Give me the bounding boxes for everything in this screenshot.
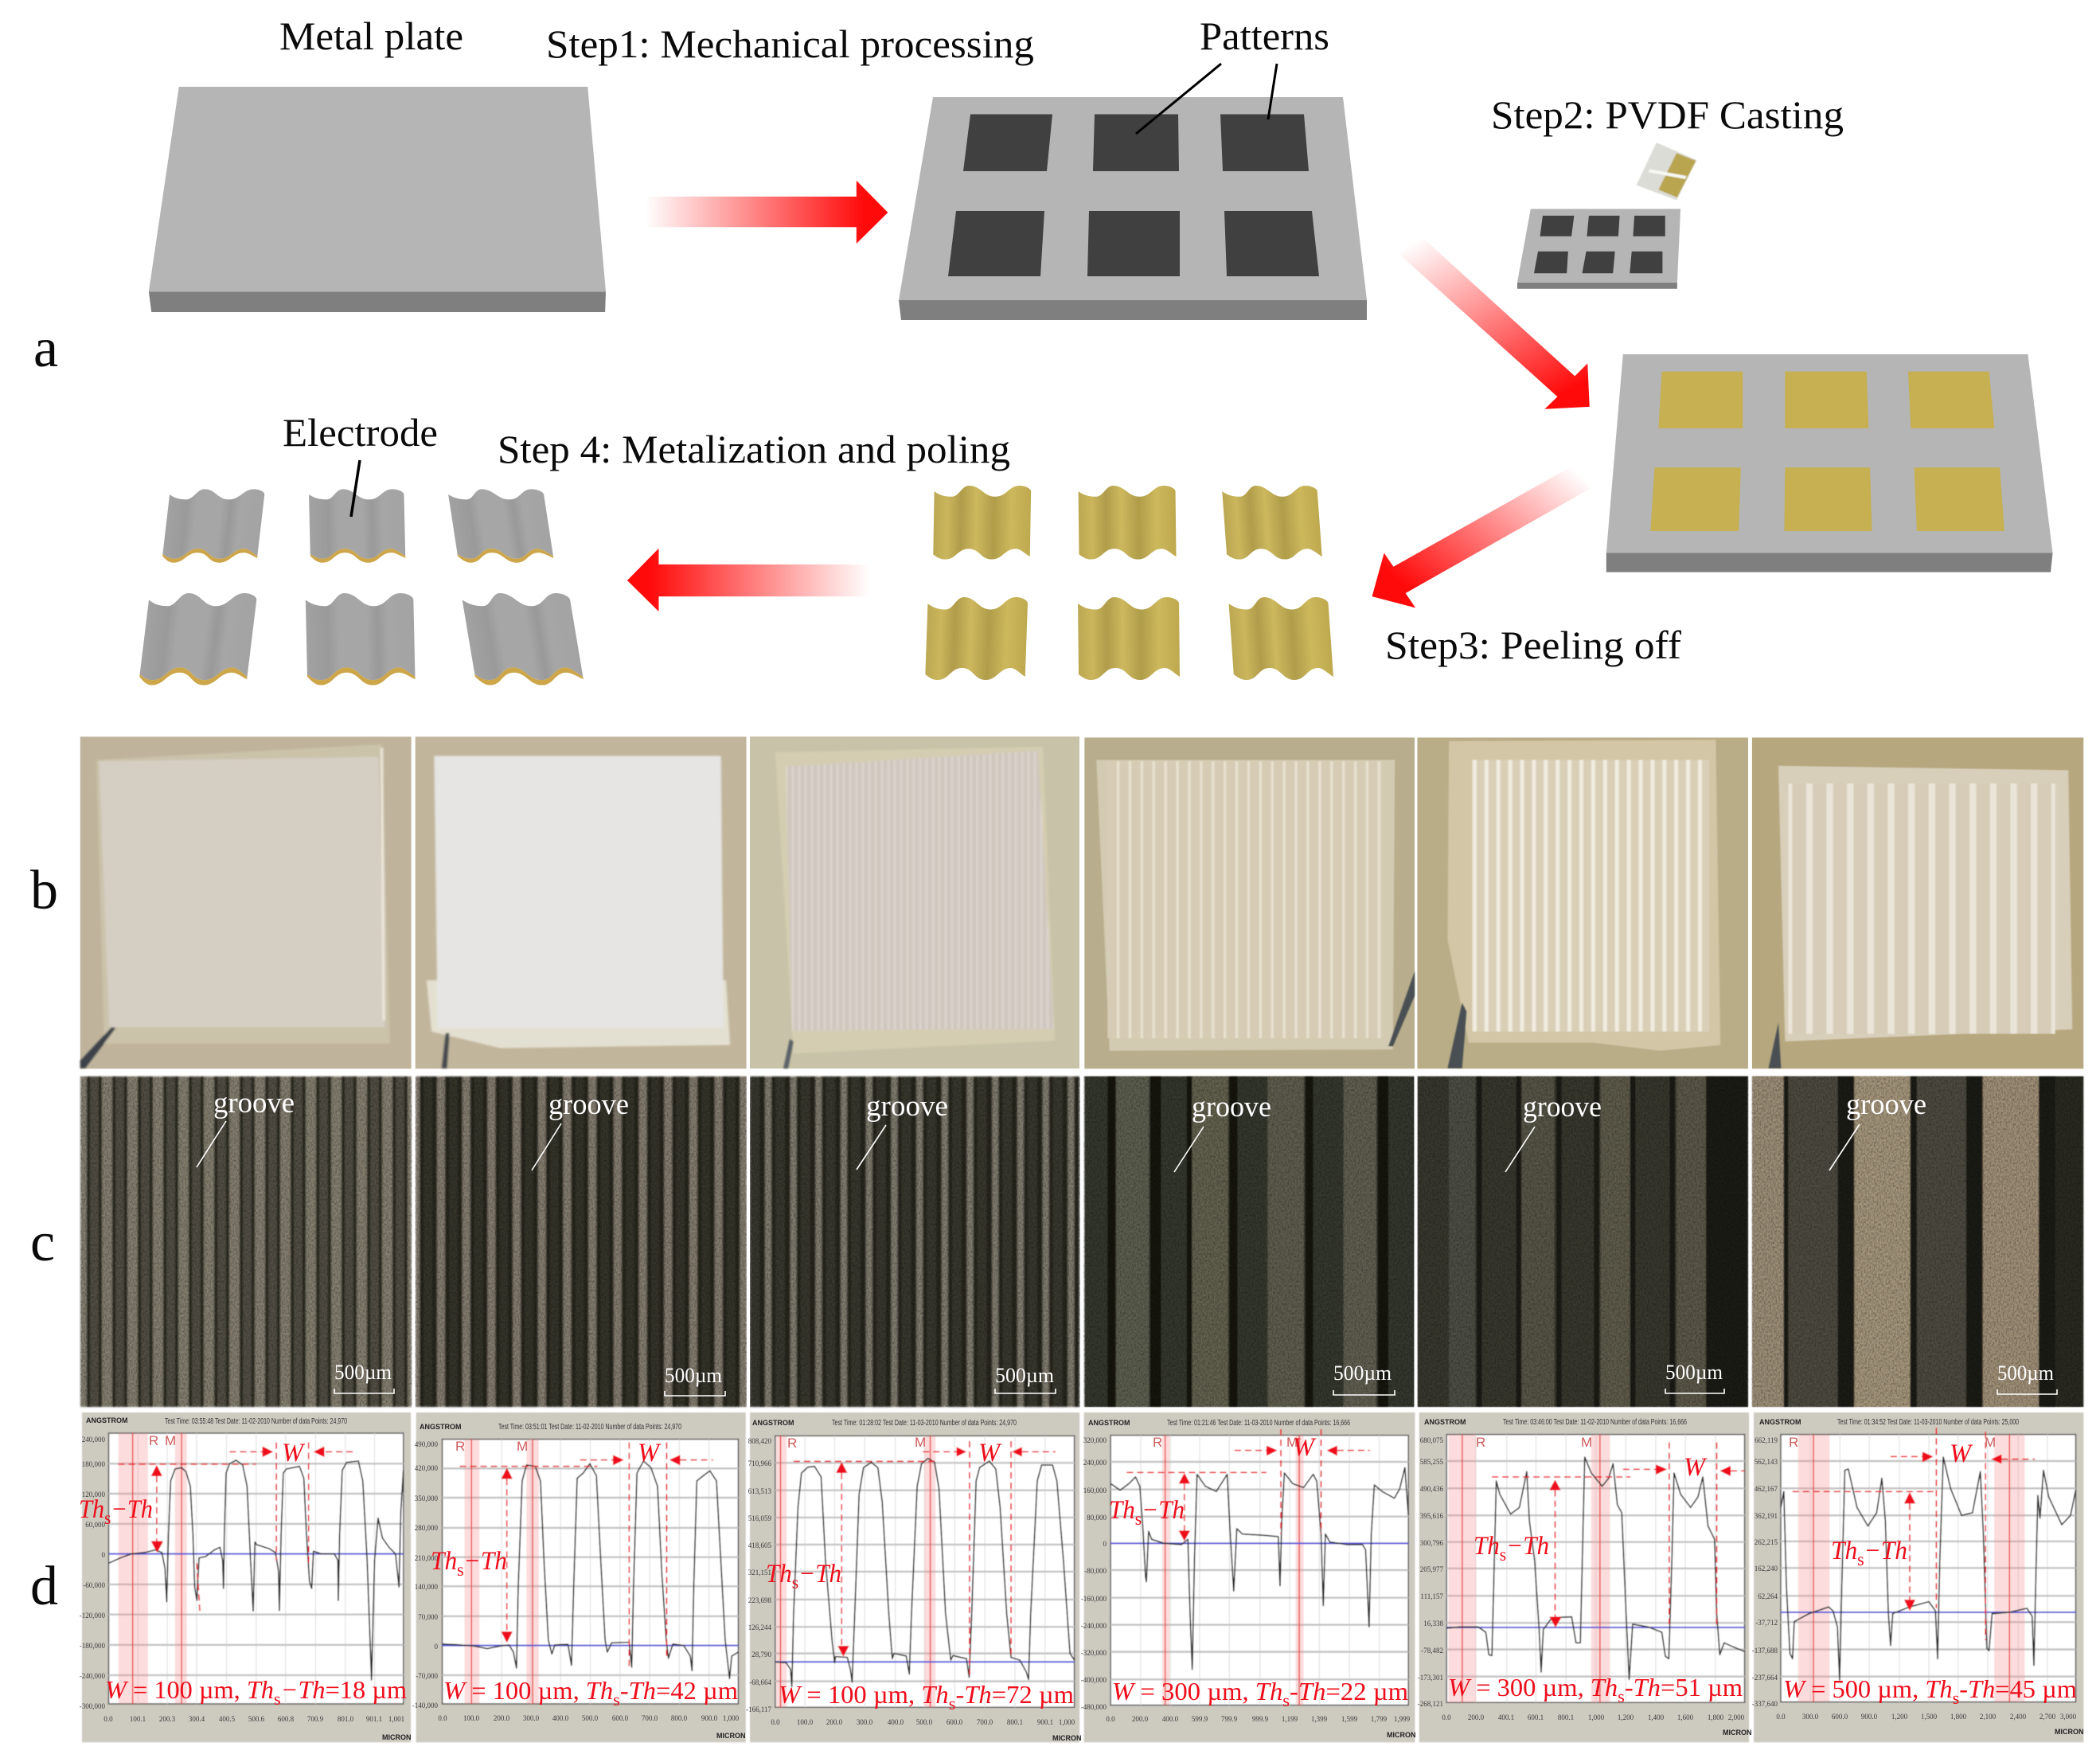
groove labels and leaders: groove: [1846, 1088, 1926, 1121]
chart d1: 120,000: [82, 1490, 105, 1498]
chart d2: 300.0: [523, 1714, 540, 1722]
chart d4: 200.0: [1132, 1715, 1149, 1723]
chart d4: 1,999: [1394, 1715, 1411, 1723]
chart d1: W: [282, 1439, 305, 1467]
micrographs c1 to c3: [80, 1076, 1079, 1407]
chart d6: [1752, 1412, 2084, 1742]
chart d1: s: [104, 1508, 111, 1528]
chart d4: 1,199: [1282, 1715, 1298, 1723]
scale bars: 500µm: [995, 1364, 1054, 1387]
chart d3: 700.0: [977, 1718, 993, 1726]
panel letter d: d: [30, 1556, 58, 1617]
chart d5: 1,200: [1618, 1713, 1634, 1721]
chart d6: -237,664: [1752, 1674, 1778, 1682]
chart d6: s: [1857, 1549, 1864, 1569]
chart d2: 420,000: [415, 1464, 438, 1472]
chart d3: 900.1: [1037, 1718, 1053, 1726]
chart d4: 1,399: [1311, 1715, 1328, 1723]
chart d2: 1,000: [723, 1714, 740, 1722]
chart d3: 516,059: [748, 1514, 772, 1522]
chart d1: -60,000: [83, 1581, 105, 1589]
chart d5: 680,075: [1420, 1436, 1444, 1444]
chart d4: -400,000: [1081, 1676, 1107, 1684]
chart d2: 0: [435, 1643, 438, 1651]
chart d3: 200.0: [826, 1718, 843, 1726]
chart d2: R: [455, 1439, 465, 1454]
leader lines: patterns: [1136, 64, 1277, 134]
chart d2: ANGSTROM: [420, 1423, 462, 1431]
groove labels and leaders: groove: [213, 1087, 295, 1119]
chart d1: =18 µm: [326, 1675, 406, 1704]
chart d5: s: [1618, 1686, 1625, 1706]
chart d3: W = 100 µm, Th: [779, 1680, 948, 1709]
chart d6: 2,400: [2010, 1713, 2027, 1721]
chart d3: M: [915, 1435, 926, 1450]
chart d3: W: [978, 1439, 1001, 1467]
chart d2: 140,000: [415, 1583, 438, 1591]
chart d1: -120,000: [80, 1612, 105, 1619]
chart d6: 2,700: [2039, 1713, 2056, 1721]
gold filled plate: [1606, 354, 2053, 572]
chart d1: Test Time: 03:55:48 Test Date: 11-02-2010 Number of data Points: 24,970: [165, 1417, 347, 1426]
micrograph grain texture: [80, 1076, 2083, 1407]
chart d6: -337,640: [1752, 1700, 1778, 1708]
scale bars: 500µm: [1333, 1362, 1392, 1385]
chart d4: Th: [1109, 1496, 1137, 1525]
chart d4: R: [1153, 1435, 1162, 1450]
chart d1: W = 100 µm, Th: [105, 1675, 274, 1704]
chart d3: 100.0: [797, 1718, 814, 1726]
panel letter a: a: [33, 318, 58, 379]
chart d2: 100.0: [463, 1714, 480, 1722]
small plate and casting vial: [1517, 143, 1696, 289]
chart d1: -300,000: [80, 1702, 105, 1710]
chart d1: 0: [102, 1551, 105, 1559]
chart d1: M: [165, 1433, 176, 1448]
chart d2: -140,000: [412, 1701, 438, 1709]
chart d3: -166,117: [746, 1705, 771, 1713]
micrographs c4 to c6: [1084, 1076, 2083, 1407]
chart d3: 400.0: [888, 1718, 904, 1726]
chart d3: 808,420: [748, 1437, 772, 1445]
chart d1: −Th: [281, 1675, 326, 1704]
leader line: electrode: [351, 460, 360, 517]
chart d3: 500.0: [916, 1718, 933, 1726]
chart d2: W = 100 µm, Th: [443, 1676, 613, 1705]
chart d4: 999.9: [1252, 1715, 1269, 1723]
chart d4: -240,000: [1081, 1622, 1107, 1630]
heading: step 3: Step3: Peeling off: [1385, 623, 1681, 667]
chart d6: 162,240: [1755, 1565, 1778, 1573]
chart d4: 80,000: [1087, 1514, 1107, 1522]
arrow: to peeled films: [1372, 464, 1590, 608]
chart d5: 1,600: [1677, 1713, 1694, 1721]
chart d1: 0.0: [103, 1715, 113, 1723]
column gaps: [414, 1071, 1750, 1409]
photo b4 to b6: [1084, 737, 2083, 1069]
chart d4: W = 300 µm, Th: [1112, 1677, 1282, 1705]
chart d1: 60,000: [85, 1521, 105, 1529]
panel b: film photographs: [30, 736, 2083, 1069]
chart d5: 600.1: [1528, 1713, 1544, 1721]
chart d3: Th: [766, 1560, 794, 1588]
chart d6: −Th: [1864, 1537, 1907, 1565]
chart d5: 1,800: [1708, 1713, 1724, 1721]
electroded corrugated films: [139, 489, 584, 685]
chart d6: Test Time: 01:34:52 Test Date: 11-03-2010 Number of data Points: 25,000: [1837, 1418, 2019, 1427]
chart d1: [79, 1412, 411, 1742]
chart d6: 1,800: [1950, 1713, 1967, 1721]
chart d4: 400.0: [1162, 1715, 1179, 1723]
chart d2: 70,000: [418, 1613, 438, 1621]
chart d5: 2,000: [1728, 1713, 1745, 1721]
chart d6: 2,100: [1980, 1713, 1997, 1721]
chart d6: 62,264: [1758, 1592, 1778, 1600]
chart d4: 0: [1103, 1540, 1107, 1548]
chart d5: -268,121: [1418, 1700, 1443, 1708]
chart d2: =42 µm: [656, 1676, 736, 1705]
chart d2: -Th: [620, 1676, 656, 1705]
chart d1: R: [149, 1433, 158, 1448]
chart d3: 300.0: [857, 1718, 873, 1726]
scale bars: [334, 1361, 2057, 1396]
patterned plate: [899, 97, 1367, 320]
chart d3: 613,513: [748, 1487, 772, 1495]
chart d5: Test Time: 03:46:00 Test Date: 11-02-2010 Number of data Points: 16,666: [1503, 1418, 1687, 1427]
chart d2: 600.0: [612, 1714, 629, 1722]
arrow: to gold plate: [1400, 233, 1590, 409]
chart d3: R: [787, 1436, 797, 1451]
chart d6: 562,143: [1755, 1458, 1778, 1466]
chart d5: M: [1581, 1435, 1592, 1450]
chart d5: Th: [1474, 1532, 1501, 1561]
chart d5: MICRON: [1723, 1729, 1751, 1737]
chart d3: 321,151: [748, 1569, 771, 1576]
chart d3: 1,000: [1059, 1718, 1075, 1726]
chart d4: MICRON: [1387, 1731, 1415, 1739]
chart d3: ANGSTROM: [752, 1419, 794, 1427]
metal plate: [149, 87, 606, 312]
chart d6: 0.0: [1776, 1713, 1786, 1721]
chart d5: 490,436: [1420, 1485, 1444, 1493]
arrow: metal plate to patterned plate: [645, 181, 888, 244]
photo b1 and b2: [80, 736, 747, 1069]
chart d4: M: [1286, 1435, 1298, 1450]
chart d5: 0.0: [1442, 1713, 1451, 1721]
chart d5: W: [1684, 1453, 1707, 1482]
heading: step 2: Step2: PVDF Casting: [1491, 92, 1844, 137]
chart d5: 585,255: [1420, 1458, 1444, 1466]
chart d4: 0.0: [1106, 1715, 1115, 1723]
chart d5: -Th: [1625, 1673, 1661, 1701]
chart d3: -Th: [955, 1680, 992, 1709]
chart d1: 500.6: [248, 1715, 265, 1723]
chart d4: =22 µm: [1325, 1677, 1407, 1705]
chart d6: MICRON: [2055, 1728, 2084, 1736]
chart d3: 418,605: [748, 1541, 772, 1549]
chart d1: 180,000: [82, 1460, 105, 1468]
chart d4: 799.9: [1221, 1715, 1238, 1723]
chart d4: 240,000: [1083, 1459, 1107, 1467]
chart d4: −Th: [1142, 1496, 1185, 1525]
chart d1: 300.4: [189, 1715, 205, 1723]
chart d4: 1,599: [1341, 1715, 1358, 1723]
chart d3: MICRON: [1052, 1734, 1081, 1742]
chart d3: 600.0: [947, 1718, 963, 1726]
chart d6: 3,000: [2060, 1713, 2077, 1721]
heading: metal plate: Metal plate: [279, 14, 463, 58]
chart d6: s: [1953, 1688, 1959, 1708]
chart d4: 160,000: [1083, 1487, 1107, 1494]
chart d1: -180,000: [80, 1642, 105, 1650]
chart d6: Th: [1831, 1537, 1859, 1565]
scale bars: 500µm: [1997, 1362, 2054, 1385]
chart d3: −Th: [798, 1560, 841, 1588]
chart d5: 16,338: [1423, 1619, 1444, 1627]
chart d6: -Th: [1959, 1674, 1995, 1703]
chart d3: 223,698: [748, 1596, 772, 1604]
chart d1: −Th: [111, 1495, 153, 1524]
chart d5: -173,301: [1418, 1674, 1443, 1682]
groove labels and leaders: groove: [1192, 1091, 1271, 1123]
chart d5: 395,616: [1420, 1512, 1444, 1520]
heading: patterns: Patterns: [1200, 14, 1329, 58]
chart d3: 0.0: [771, 1718, 780, 1726]
chart d2: −Th: [464, 1547, 507, 1576]
chart d1: ANGSTROM: [86, 1416, 127, 1424]
panel c: micrographs: [30, 1071, 2083, 1409]
chart d1: 1,001: [388, 1715, 404, 1723]
chart d6: ANGSTROM: [1759, 1418, 1801, 1426]
chart d5: 800.1: [1558, 1713, 1574, 1721]
heading: step 1: Step1: Mechanical processing: [546, 21, 1034, 66]
chart d3: =72 µm: [992, 1680, 1072, 1709]
chart d4: W: [1293, 1433, 1316, 1462]
chart d1: 400.5: [219, 1715, 236, 1723]
chart d2: 350,000: [415, 1494, 438, 1502]
chart d5: 111,157: [1420, 1592, 1443, 1600]
chart d6: 362,191: [1755, 1512, 1778, 1520]
chart d1: 240,000: [82, 1436, 105, 1444]
scale bars: 500µm: [665, 1364, 722, 1387]
chart d2: [412, 1412, 746, 1742]
chart d4: -160,000: [1081, 1595, 1107, 1603]
chart d6: 262,215: [1755, 1538, 1778, 1546]
gold corrugated films: [925, 486, 1333, 680]
chart d2: 700.0: [642, 1714, 658, 1722]
chart d5: W = 300 µm, Th: [1448, 1673, 1618, 1701]
chart d4: -320,000: [1081, 1649, 1107, 1657]
chart d4: [1081, 1412, 1415, 1742]
chart d4: 599.9: [1192, 1715, 1208, 1723]
heading: step 4: Step 4: Metalization and poling: [498, 427, 1010, 471]
chart d2: 400.0: [552, 1714, 569, 1722]
chart d3: 800.1: [1007, 1718, 1023, 1726]
chart d2: 800.0: [671, 1714, 688, 1722]
panel letter c: c: [30, 1212, 55, 1273]
chart d4: -480,000: [1081, 1703, 1107, 1711]
chart d3: -68,664: [749, 1678, 771, 1686]
chart d5: 400.1: [1498, 1713, 1514, 1721]
chart d6: 300.0: [1802, 1713, 1819, 1721]
chart d6: 900.0: [1861, 1713, 1878, 1721]
chart d2: 900.0: [701, 1714, 718, 1722]
chart d2: s: [613, 1690, 620, 1709]
chart d2: 500.0: [582, 1714, 599, 1722]
chart d3: 710,966: [748, 1459, 772, 1467]
chart d5: [1418, 1412, 1751, 1742]
chart d1: 700.9: [307, 1715, 324, 1723]
chart d3: s: [792, 1573, 798, 1592]
chart d5: 300,796: [1420, 1539, 1444, 1547]
heading: electrode: Electrode: [283, 410, 438, 455]
chart d1: s: [274, 1689, 281, 1709]
photo b3: [750, 736, 1079, 1069]
chart d3: 28,790: [751, 1651, 772, 1658]
chart d2: 210,000: [415, 1554, 438, 1562]
chart d1: -240,000: [80, 1672, 105, 1680]
chart d5: 1,000: [1588, 1713, 1605, 1721]
chart d5: 1,400: [1648, 1713, 1665, 1721]
chart d5: ANGSTROM: [1424, 1418, 1466, 1426]
scale bars: 500µm: [1665, 1361, 1723, 1384]
chart d4: 320,000: [1083, 1436, 1107, 1444]
groove labels and leaders: [197, 1087, 1926, 1172]
chart d3: s: [949, 1694, 955, 1713]
chart d1: 200.3: [159, 1715, 176, 1723]
chart d5: −Th: [1506, 1532, 1549, 1561]
chart d1: 801.0: [338, 1715, 354, 1723]
chart d2: -70,000: [416, 1672, 438, 1680]
groove labels and leaders: groove: [1523, 1091, 1602, 1123]
chart d6: 600.0: [1832, 1713, 1848, 1721]
panel d: surface profiles: [30, 1412, 2084, 1742]
chart d5: =51 µm: [1661, 1673, 1741, 1701]
chart d2: 200.0: [494, 1714, 510, 1722]
chart d2: Test Time: 03:51:01 Test Date: 11-02-2010 Number of data Points: 24,970: [498, 1423, 681, 1432]
groove labels and leaders: groove: [548, 1088, 629, 1121]
chart d5: -78,482: [1421, 1647, 1443, 1655]
arrow: to electroded films: [627, 549, 870, 611]
chart d6: -37,712: [1755, 1619, 1778, 1627]
chart d4: s: [1135, 1509, 1142, 1529]
chart d4: -Th: [1290, 1677, 1325, 1705]
chart d1: 600.8: [278, 1715, 295, 1723]
groove labels and leaders: groove: [866, 1090, 948, 1123]
chart d1: 901.1: [366, 1715, 382, 1723]
chart d2: s: [457, 1560, 464, 1580]
chart d6: 462,167: [1755, 1485, 1778, 1493]
chart d6: M: [1985, 1435, 1996, 1450]
chart d2: W: [638, 1439, 661, 1467]
chart d4: -80,000: [1084, 1567, 1107, 1575]
scale bars: 500µm: [334, 1361, 392, 1384]
chart d2: 490,000: [415, 1440, 438, 1448]
chart d3: [746, 1412, 1081, 1742]
chart d6: W = 500 µm, Th: [1783, 1674, 1952, 1703]
chart d6: 662,119: [1755, 1436, 1778, 1444]
chart d3: 126,244: [748, 1623, 772, 1631]
chart d2: M: [517, 1439, 528, 1454]
chart d5: R: [1476, 1435, 1485, 1450]
chart d1: Th: [79, 1495, 107, 1524]
chart d2: 280,000: [415, 1524, 438, 1532]
chart d1: 100.1: [130, 1715, 146, 1723]
chart d6: 1,500: [1921, 1713, 1938, 1721]
chart d4: ANGSTROM: [1088, 1419, 1130, 1427]
chart d5: 205,977: [1420, 1565, 1444, 1573]
chart d3: Test Time: 01:28:02 Test Date: 11-03-2010 Number of data Points: 24,970: [832, 1419, 1017, 1428]
chart d1: MICRON: [382, 1733, 411, 1741]
chart d6: 1,200: [1891, 1713, 1908, 1721]
chart d2: MICRON: [716, 1732, 745, 1740]
chart d6: -137,688: [1752, 1647, 1778, 1655]
panel a: fabrication process: [33, 14, 2053, 685]
chart d6: =45 µm: [1995, 1674, 2076, 1703]
chart d4: s: [1282, 1690, 1290, 1710]
chart d2: 0.0: [438, 1714, 447, 1722]
chart d2: Th: [431, 1547, 459, 1576]
chart d6: W: [1950, 1440, 1973, 1468]
chart d5: s: [1500, 1545, 1506, 1565]
chart d4: Test Time: 01:21:46 Test Date: 11-03-2010 Number of data Points: 16,666: [1167, 1419, 1350, 1428]
chart d4: 1,799: [1371, 1715, 1388, 1723]
panel letter b: b: [30, 860, 58, 921]
chart d5: 200.0: [1468, 1713, 1485, 1721]
chart d6: R: [1789, 1435, 1798, 1450]
